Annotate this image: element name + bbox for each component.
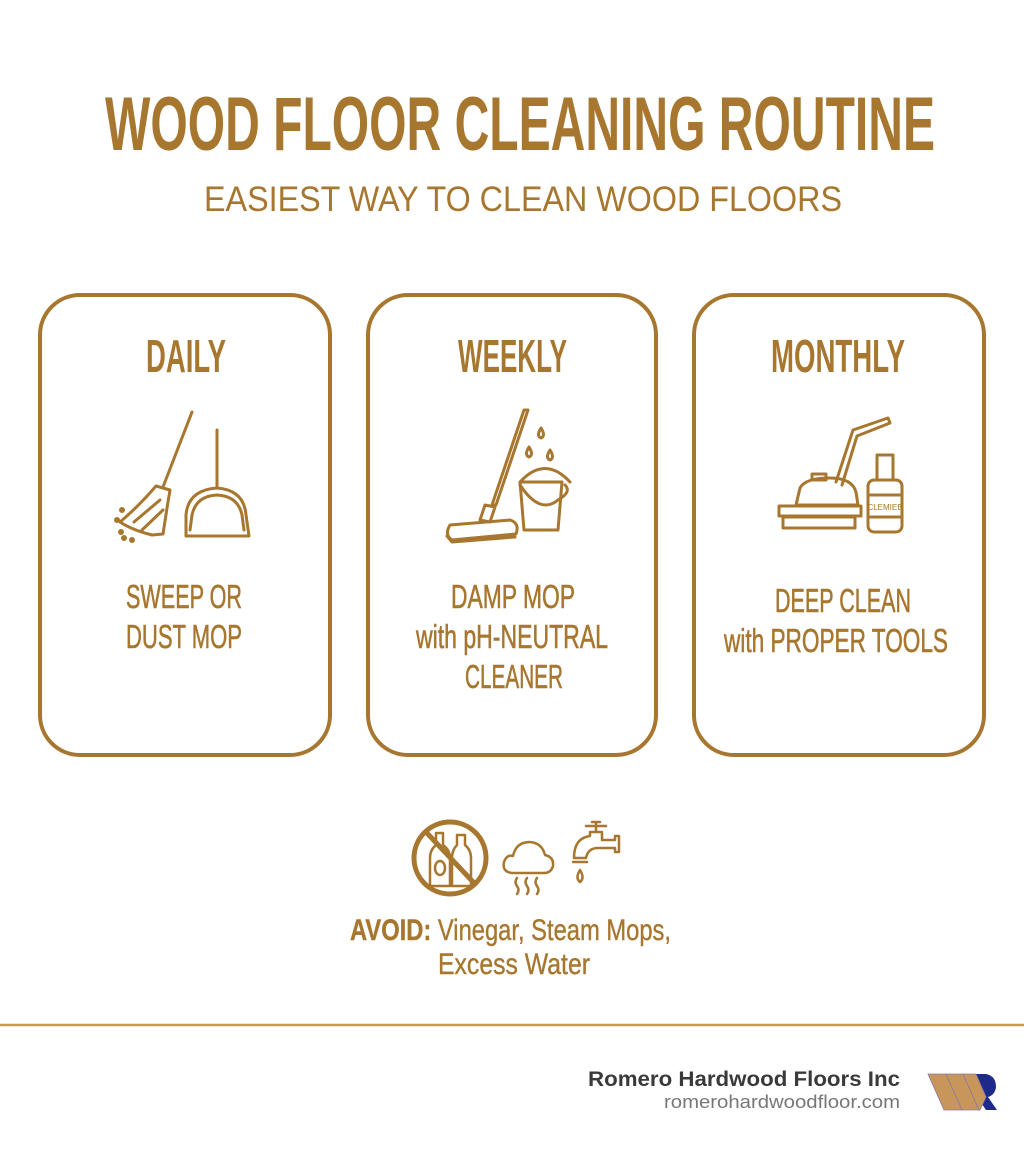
panel: weekly	[368, 295, 656, 755]
text: weekly: DAMP MOP	[451, 578, 575, 615]
text: daily: SWEEP OR	[126, 578, 242, 615]
text: avoid: Excess Water	[438, 948, 590, 981]
footer: company: Romero Hardwood Floors Inc	[588, 1068, 900, 1091]
text: daily: DUST MOP	[126, 618, 242, 655]
panel: monthly: CLEMIEB	[867, 503, 903, 512]
icon: floor machine and bottle	[779, 418, 902, 532]
text: avoid: AVOID: Vinegar, Steam Mops,	[350, 914, 671, 947]
footer: company	[588, 1068, 900, 1112]
icon: broom and dustpan	[116, 412, 249, 542]
heading: monthly: MONTHLY	[771, 330, 905, 382]
text: avoid	[350, 914, 671, 981]
text: weekly: with pH-NEUTRAL	[415, 618, 608, 655]
text: monthly: DEEP CLEAN	[775, 582, 911, 619]
panel: monthly	[694, 295, 984, 755]
heading: weekly: WEEKLY	[458, 330, 567, 382]
heading: daily: DAILY	[146, 330, 226, 382]
icon: no bottles	[414, 822, 486, 894]
icon: faucet	[573, 822, 619, 882]
icons: avoid	[414, 822, 619, 894]
icon: steam cloud	[504, 842, 553, 894]
subtitle: EASIEST WAY TO CLEAN WOOD FLOORS	[204, 180, 842, 219]
panel: daily	[40, 295, 330, 755]
footer: company: romerohardwoodfloor.com	[664, 1092, 900, 1112]
icon: mop and bucket	[447, 410, 570, 542]
text: weekly: CLEANER	[465, 658, 563, 695]
logo	[928, 1074, 997, 1110]
